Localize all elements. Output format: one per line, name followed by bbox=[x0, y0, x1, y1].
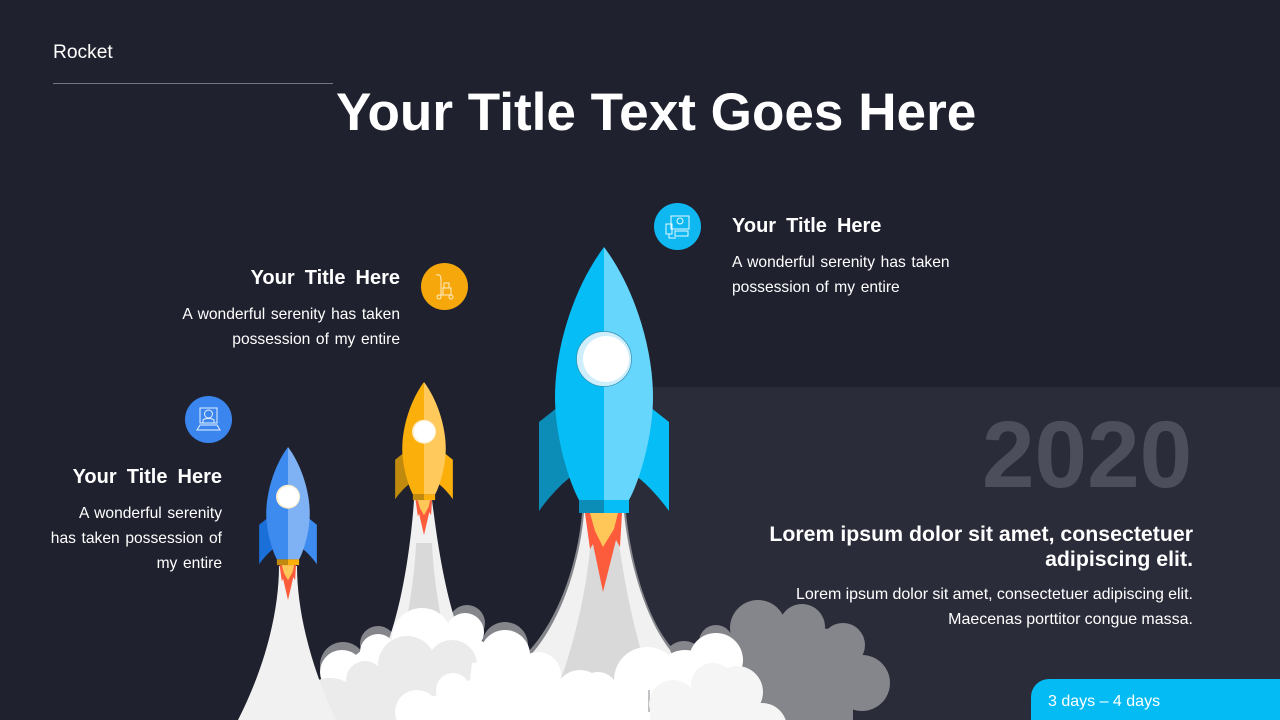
rocket: middle yellow bbox=[395, 382, 453, 535]
text block: right item: possession of my entire bbox=[732, 279, 900, 296]
smoke: pale right cloud bbox=[649, 663, 787, 720]
text block: right item: Your Title Here bbox=[732, 215, 881, 237]
rocket: large cyan bbox=[539, 247, 669, 592]
smoke: light grey cloud bbox=[296, 636, 477, 720]
exhaust: large rocket bbox=[525, 513, 700, 720]
back smoke: grey cloud bbox=[320, 600, 890, 720]
rocket: small blue bbox=[259, 447, 317, 565]
panel body text: Maecenas porttitor congue massa. bbox=[948, 611, 1193, 628]
text block: right item bbox=[732, 215, 950, 296]
exhaust: middle rocket bbox=[385, 500, 466, 650]
icon: monitor on cyan circle bbox=[654, 203, 701, 250]
text block: left item: my entire bbox=[157, 555, 222, 572]
text block: left item: Your Title Here bbox=[73, 466, 222, 488]
text block: left item: A wonderful serenity bbox=[79, 505, 222, 522]
smoke: white back cloud bbox=[320, 608, 561, 720]
panel body text bbox=[796, 586, 1193, 628]
divider line bbox=[53, 83, 333, 84]
icon: hand truck on orange circle bbox=[421, 263, 468, 310]
panel heading: adipiscing elit. bbox=[1045, 547, 1193, 571]
panel heading: Lorem ipsum dolor sit amet, consectetuer bbox=[769, 522, 1193, 546]
icon: laptop on blue circle bbox=[185, 396, 232, 443]
text block: middle item: Your Title Here bbox=[251, 267, 400, 289]
text block: right item: A wonderful serenity has taken bbox=[732, 254, 950, 271]
tab: duration bbox=[1031, 679, 1280, 720]
title: Your Title Text Goes Here bbox=[336, 83, 976, 142]
text block: middle item: A wonderful serenity has taken bbox=[182, 306, 400, 323]
year: 2020 bbox=[982, 402, 1192, 508]
section label: Rocket bbox=[53, 42, 113, 63]
text block: middle item: possession of my entire bbox=[232, 331, 400, 348]
tab: duration: 3 days – 4 days bbox=[1048, 693, 1160, 710]
text block: middle item bbox=[182, 267, 400, 348]
text block: left item bbox=[51, 466, 222, 572]
smoke: white front cloud bbox=[395, 633, 753, 720]
flame: small rocket bbox=[280, 565, 296, 600]
panel body text: Lorem ipsum dolor sit amet, consectetuer adipiscing elit. bbox=[796, 586, 1193, 603]
exhaust: small rocket bbox=[238, 566, 336, 720]
panel: 2020 background bbox=[604, 387, 1280, 720]
panel heading bbox=[769, 522, 1193, 571]
text block: left item: has taken possession of bbox=[51, 530, 222, 547]
